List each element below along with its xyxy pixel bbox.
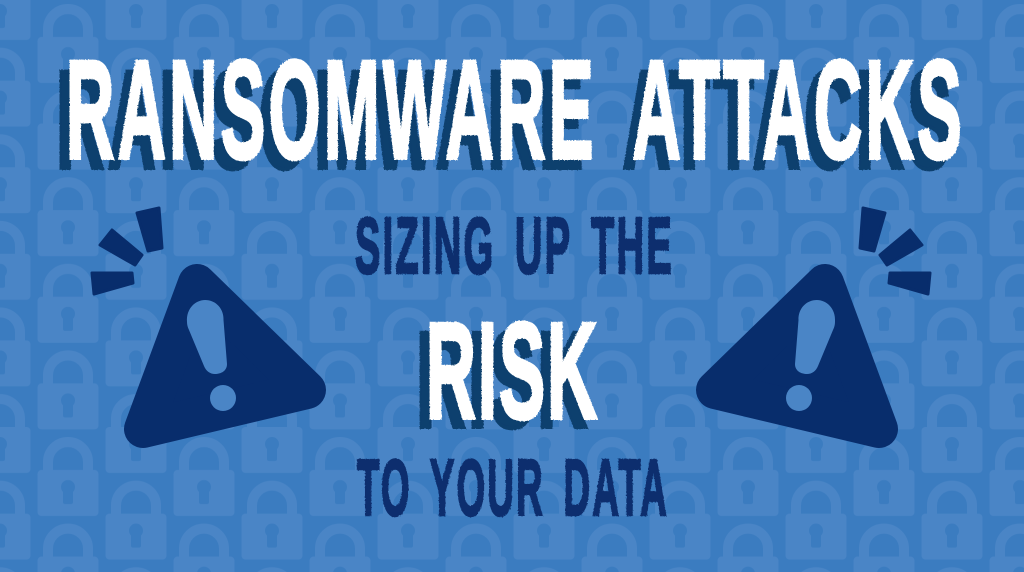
infographic canvas: TO YOUR DATA (357, 443, 669, 532)
heading: risk: RISK (426, 295, 599, 448)
icon: left warning triangle (92, 208, 307, 429)
heading: risk (416, 295, 599, 457)
icon: right warning triangle (715, 208, 930, 429)
heading: risk: RISK (416, 304, 589, 457)
infographic canvas: SIZING UP THE (355, 201, 674, 290)
